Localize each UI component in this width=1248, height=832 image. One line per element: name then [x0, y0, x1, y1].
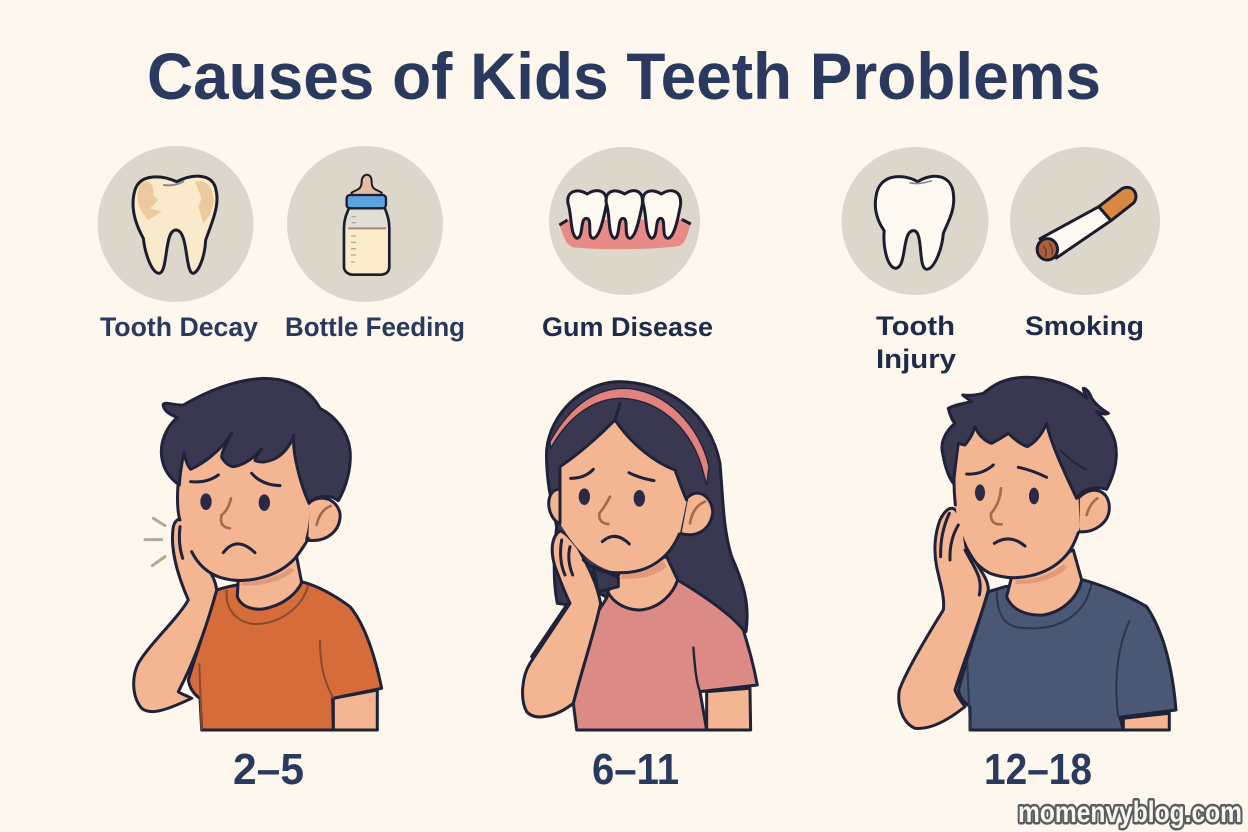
- sleeve crease: [693, 647, 700, 692]
- icon: teeth and inflamed gums: [549, 147, 700, 295]
- ear: [1078, 490, 1109, 532]
- hair: [942, 377, 1116, 498]
- left ear: [549, 489, 560, 524]
- neck: [237, 557, 302, 609]
- jaw outline: [177, 467, 308, 580]
- panel: gum disease: [542, 147, 713, 342]
- character: young boy holding cheek: [134, 378, 382, 730]
- hair: [161, 378, 350, 503]
- nose and ear detail: [599, 497, 705, 524]
- eyebrows and mouth: [191, 473, 280, 553]
- shirt details: [199, 585, 333, 730]
- right ear: [680, 493, 713, 535]
- eyes: [200, 493, 270, 511]
- label: gum disease: Gum Disease: [542, 312, 713, 342]
- pain lines: [145, 518, 165, 566]
- icon: decayed tooth: [98, 146, 254, 302]
- face: [954, 427, 1080, 577]
- shirt details: [967, 583, 1130, 730]
- face outline: [560, 420, 687, 573]
- eyes: [579, 488, 645, 507]
- arm and hand: [523, 531, 601, 717]
- arm and hand: [134, 519, 217, 712]
- title: Causes of Kids Teeth Problems: [147, 39, 1101, 113]
- finger line: [179, 527, 183, 558]
- nose and ear detail: [221, 498, 331, 528]
- icon: white tooth: [842, 147, 988, 295]
- navy t-shirt: [958, 580, 1176, 730]
- finger and palm lines: [941, 513, 980, 595]
- pink strip: [532, 605, 572, 662]
- icon: baby bottle: [287, 146, 443, 302]
- character: girl holding cheek: [523, 382, 757, 730]
- eyebrows and mouth: [967, 465, 1047, 546]
- nose and ear detail: [991, 488, 1097, 524]
- panel: smoking: [1010, 147, 1160, 341]
- neck: [608, 557, 678, 610]
- face outline: [954, 450, 1078, 578]
- eyes: [975, 484, 1039, 504]
- eyebrows and mouth: [571, 469, 654, 544]
- age label: 6-11: 6–11: [592, 745, 679, 794]
- ear: [307, 498, 340, 540]
- label: smoking: Smoking: [1025, 311, 1144, 341]
- panel: bottle feeding: [285, 146, 465, 342]
- long hair back: [546, 382, 747, 637]
- neck: [1007, 550, 1082, 615]
- right arm: [707, 688, 751, 730]
- chin shadow: [620, 561, 667, 579]
- pink t-shirt: [573, 580, 757, 730]
- finger lines: [561, 540, 573, 575]
- arm and hand: [899, 508, 988, 728]
- icon: cigarette: [1010, 147, 1160, 295]
- face: [177, 437, 310, 580]
- hair under chin: [593, 567, 618, 592]
- hair strand: [1060, 450, 1087, 470]
- face: [560, 420, 687, 573]
- character: teenage boy holding cheek: [899, 377, 1176, 730]
- label: bottle feeding: Bottle Feeding: [285, 312, 465, 342]
- parting line: [615, 403, 620, 420]
- orange t-shirt: [188, 582, 382, 730]
- right arm: [333, 690, 377, 730]
- chin shadow: [1015, 564, 1067, 584]
- age label: 2-5: 2–5: [233, 745, 304, 794]
- panel: tooth injury: [842, 147, 988, 374]
- right arm: [1123, 713, 1169, 730]
- label: tooth injury: Tooth: [876, 311, 955, 341]
- label: tooth injury: Injury: [876, 344, 956, 374]
- panel: tooth decay: [98, 146, 258, 342]
- chin shadow: [241, 567, 295, 586]
- headband: [550, 388, 709, 485]
- age label: 12-18: 12–18: [984, 745, 1092, 794]
- label: tooth decay: Tooth Decay: [100, 312, 258, 342]
